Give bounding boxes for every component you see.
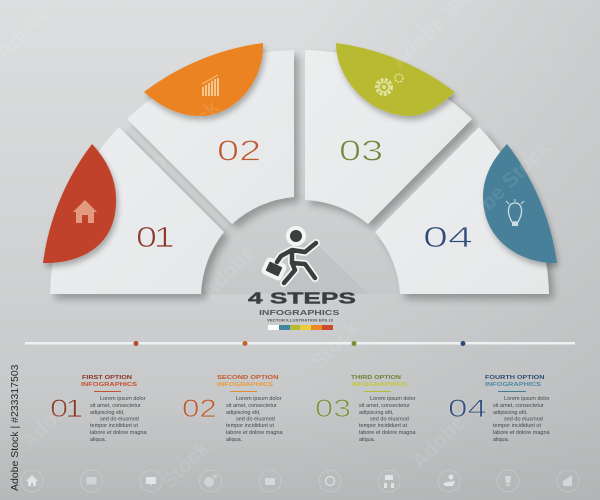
option 4 body: sed do eiusmod: [504, 416, 543, 422]
step number 02: 02: [217, 135, 261, 167]
option 1 body: Lorem ipsum dolor: [100, 396, 146, 402]
option 4 heading: FOURTH OPTION: [485, 375, 545, 381]
option 2 body: aliqua.: [226, 437, 243, 443]
option 2: [182, 375, 284, 443]
subtitle: infographics: INFOGRAPHICS: [259, 309, 339, 317]
caption: VECTOR ILLUSTRATION EPS 10: [267, 318, 334, 322]
option 3 body: sit amet, consectetur: [359, 403, 410, 409]
title: 4 STEPS: 4 STEPS: [248, 289, 356, 307]
watermarks: Adobe: [17, 391, 80, 454]
option 1 body: tempor incididunt ut: [90, 423, 138, 429]
panel: segment 3: [305, 43, 472, 224]
long shadow of runner: [285, 240, 368, 294]
option 2 body: adipiscing elit,: [226, 410, 261, 416]
timeline: [25, 341, 575, 346]
panel: segment 2: [127, 43, 294, 224]
option 3 number: 03: [315, 395, 351, 423]
watermarks: Adobe Stock: [117, 96, 225, 204]
option 4 heading: [485, 375, 545, 388]
option 4 body: adipiscing elit,: [493, 410, 528, 416]
option 2 body: Lorem ipsum dolor: [236, 396, 282, 402]
option 3 body: labore et dolore magna: [359, 430, 417, 436]
watermarks: Stock: [157, 437, 214, 494]
option 1 heading: FIRST OPTION: [82, 375, 132, 381]
watermarks: Adobe: [197, 241, 260, 304]
option 1 body: sed do eiusmod: [100, 416, 139, 422]
option 2 number: 02: [182, 394, 217, 422]
option 3 heading: INFOGRAPHICS: [351, 382, 408, 388]
option 4 heading: INFOGRAPHICS: [485, 382, 542, 388]
leaf: orange with chart icon: [144, 43, 263, 116]
icon: house: [73, 200, 97, 223]
panel: segment 4: [375, 127, 557, 294]
option 4 body: aliqua.: [493, 437, 510, 443]
option 4: [448, 375, 551, 443]
option 4 body: labore et dolore magna: [493, 430, 551, 436]
option 2 body: tempor incididunt ut: [226, 423, 274, 429]
option 1 body: aliqua.: [90, 437, 107, 443]
icon: bar chart: [202, 75, 219, 96]
step number 04: 04: [423, 222, 473, 254]
option 4 body: [493, 396, 551, 443]
leaf: red with house icon: [43, 144, 116, 263]
option 2 heading: INFOGRAPHICS: [217, 382, 274, 388]
option 2 heading: SECOND OPTION: [217, 375, 279, 381]
option 2 body: sit amet, consectetur: [226, 403, 277, 409]
leaf: blue with bulb icon: [483, 144, 557, 263]
leaf: green with gears icon: [336, 43, 455, 116]
option 2 body: labore et dolore magna: [226, 430, 284, 436]
option 1: [50, 375, 148, 443]
option 2 body: [226, 396, 284, 443]
option 1 body: sit amet, consectetur: [90, 403, 141, 409]
step number 01: 01: [136, 222, 174, 254]
icon: running businessman: [266, 230, 316, 283]
bottom icon row: [21, 470, 579, 492]
option 4 number: 04: [448, 395, 487, 423]
option 2 body: sed do eiusmod: [236, 416, 275, 422]
option 3 body: sed do eiusmod: [370, 416, 409, 422]
option 2 heading: [217, 375, 279, 388]
credit text: Adobe Stock | #233317503: [9, 364, 21, 491]
watermarks: Adobe Stock: [447, 136, 555, 244]
option 1 heading: INFOGRAPHICS: [81, 382, 138, 388]
option 3 body: Lorem ipsum dolor: [370, 396, 416, 402]
option 1 heading: [81, 375, 138, 388]
watermarks: Stock: [307, 317, 364, 374]
colour strip: [268, 325, 333, 330]
option 3 body: tempor incididunt ut: [359, 423, 407, 429]
step number 03: 03: [339, 135, 383, 167]
option 3 body: [359, 396, 417, 443]
panel: segment 1: [43, 127, 224, 294]
icon: gears: [376, 74, 403, 94]
option 3 heading: THIRD OPTION: [351, 375, 401, 381]
option 4 body: sit amet, consectetur: [493, 403, 544, 409]
option 1 body: adipiscing elit,: [90, 410, 125, 416]
option 1 body: labore et dolore magna: [90, 430, 148, 436]
option 1 body: [90, 396, 148, 443]
option 4 body: tempor incididunt ut: [493, 423, 541, 429]
icon: light bulb: [506, 199, 524, 226]
central hub semicircle: [200, 194, 400, 294]
watermarks: Adobe: [407, 411, 470, 474]
option 4 body: Lorem ipsum dolor: [504, 396, 550, 402]
option 3 body: adipiscing elit,: [359, 410, 394, 416]
option 3: [315, 375, 417, 443]
option 3 body: aliqua.: [359, 437, 376, 443]
option 3 heading: [351, 375, 408, 388]
option 1 number: 01: [50, 395, 82, 423]
